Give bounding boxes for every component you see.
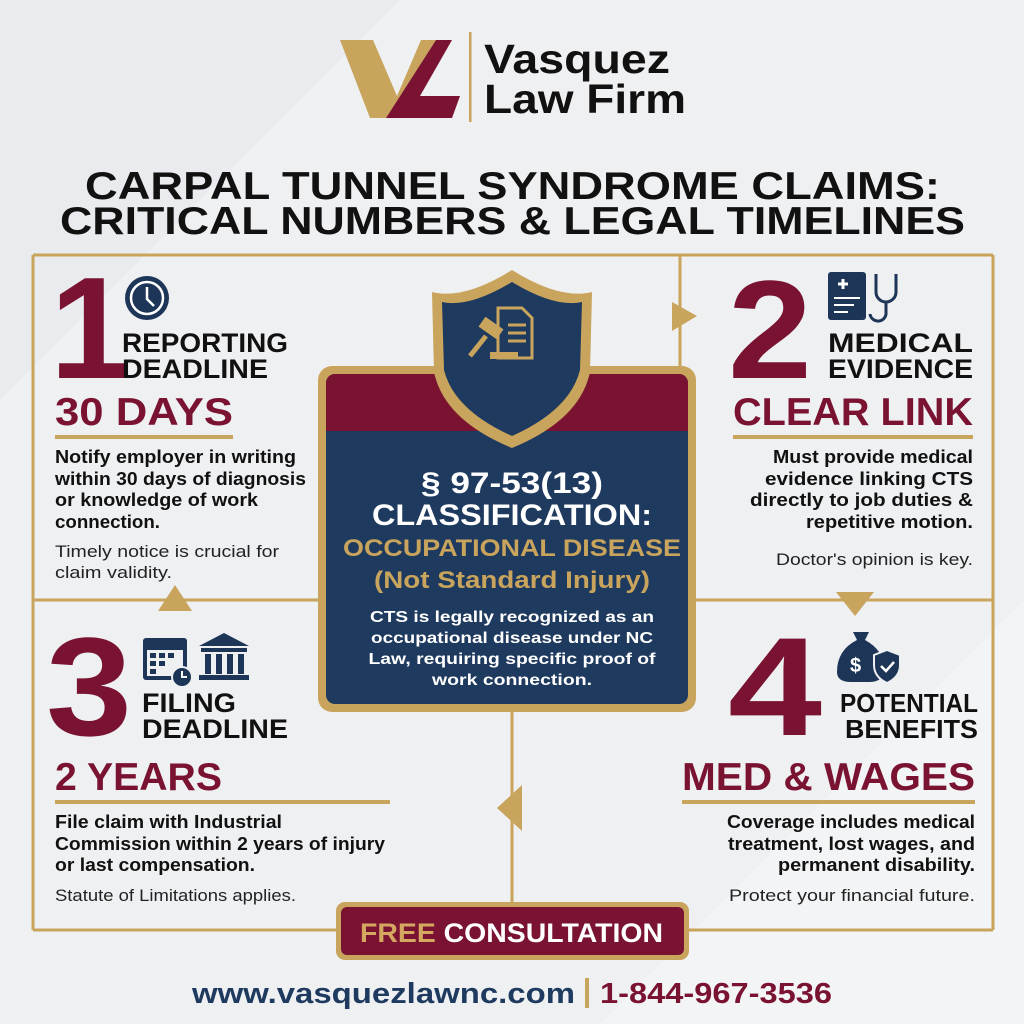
panel: 4 potential benefits: MED & WAGES bbox=[682, 756, 975, 799]
arrow: down bbox=[836, 592, 874, 616]
icon: shield with gavel bbox=[432, 270, 592, 448]
arrow: up bbox=[158, 585, 192, 611]
panel: center classification: occupational disease under NC bbox=[371, 630, 654, 647]
panel: 2 medical evidence: repetitive motion. bbox=[806, 512, 973, 532]
panel: 3 filing deadline: FILING bbox=[142, 688, 236, 718]
panel: 4 potential benefits: permanent disability. bbox=[778, 855, 975, 875]
panel: center classification: (Not Standard Injury) bbox=[374, 567, 650, 594]
icon: calendar bbox=[143, 638, 192, 687]
panel: center classification: Law, requiring specific proof of bbox=[368, 651, 656, 668]
icon: medical document stethoscope bbox=[828, 272, 896, 321]
logo bbox=[340, 32, 686, 122]
panel: 3 filing deadline: File claim with Industrial bbox=[55, 812, 282, 832]
panel: 4 potential benefits: POTENTIAL bbox=[840, 688, 978, 718]
title: CARPAL TUNNEL SYNDROME CLAIMS: bbox=[85, 165, 940, 208]
icon: courthouse bbox=[199, 633, 249, 680]
panel: 2 medical evidence: Must provide medical bbox=[773, 447, 973, 467]
panel: 4 potential benefits: 4 bbox=[728, 608, 822, 765]
panel: 3 filing deadline: 2 YEARS bbox=[55, 756, 222, 799]
button: free consultation: FREE CONSULTATION bbox=[360, 918, 663, 948]
panel: 1 reporting deadline: connection. bbox=[55, 512, 160, 532]
panel: 2 medical evidence: 2 bbox=[728, 251, 812, 408]
panel: 1 reporting deadline: claim validity. bbox=[55, 563, 172, 582]
panel: 1 reporting deadline: Notify employer in writing bbox=[55, 447, 296, 467]
panel: 2 medical evidence: evidence linking CTS bbox=[765, 469, 973, 489]
panel: 2 medical evidence bbox=[728, 251, 973, 569]
panel: center classification: CLASSIFICATION: bbox=[372, 499, 652, 532]
button: free consultation bbox=[336, 902, 689, 960]
footer contact: www.vasquezlawnc.com bbox=[191, 978, 575, 1010]
panel: 1 reporting deadline: DEADLINE bbox=[122, 354, 268, 384]
panel: 3 filing deadline: or last compensation. bbox=[55, 855, 255, 875]
panel: 2 medical evidence: CLEAR LINK bbox=[733, 391, 973, 434]
arrow: left bbox=[497, 785, 522, 831]
title bbox=[60, 165, 965, 243]
icon: money bag shield bbox=[837, 632, 900, 683]
panel: 1 reporting deadline: REPORTING bbox=[122, 328, 288, 358]
panel: center classification: work connection. bbox=[431, 672, 592, 689]
panel: 3 filing deadline: 3 bbox=[46, 608, 132, 765]
panel: 2 medical evidence: Doctor's opinion is key. bbox=[776, 550, 973, 569]
panel: 2 medical evidence: directly to job duties & bbox=[750, 490, 973, 510]
panel: center classification: § 97-53(13) bbox=[421, 467, 603, 500]
panel: 1 reporting deadline: within 30 days of diagnosis bbox=[54, 469, 306, 489]
panel: 3 filing deadline: DEADLINE bbox=[142, 714, 288, 744]
panel: 2 medical evidence: MEDICAL bbox=[828, 328, 973, 358]
panel: 1 reporting deadline: Timely notice is crucial for bbox=[55, 542, 279, 561]
panel: 4 potential benefits bbox=[682, 608, 978, 905]
panel: center classification bbox=[318, 270, 696, 712]
panel: 3 filing deadline bbox=[46, 608, 390, 905]
panel: center classification: OCCUPATIONAL DISEASE bbox=[343, 535, 681, 562]
panel: 1 reporting deadline bbox=[50, 247, 306, 582]
icon: clock bbox=[125, 276, 169, 320]
panel: 4 potential benefits: Protect your financial future. bbox=[729, 886, 975, 905]
title: CRITICAL NUMBERS & LEGAL TIMELINES bbox=[60, 200, 965, 243]
panel: 1 reporting deadline: 30 DAYS bbox=[55, 391, 233, 434]
logo: Vasquez bbox=[484, 36, 670, 82]
footer contact bbox=[191, 978, 832, 1010]
panel: 4 potential benefits: treatment, lost wages, and bbox=[728, 834, 975, 854]
panel: 1 reporting deadline: or knowledge of work bbox=[55, 490, 259, 510]
logo: Law Firm bbox=[484, 76, 686, 122]
icon: money bag shield: $ bbox=[850, 655, 861, 677]
panel: 3 filing deadline: Commission within 2 years of injury bbox=[55, 834, 385, 854]
panel: 1 reporting deadline: 1 bbox=[50, 247, 131, 409]
footer contact: 1-844-967-3536 bbox=[600, 978, 832, 1010]
panel: 4 potential benefits: Coverage includes medical bbox=[727, 812, 975, 832]
panel: 2 medical evidence: EVIDENCE bbox=[828, 354, 973, 384]
panel: 3 filing deadline: Statute of Limitations applies. bbox=[55, 886, 296, 905]
panel: center classification: CTS is legally recognized as an bbox=[370, 609, 654, 626]
panel: 4 potential benefits: BENEFITS bbox=[845, 714, 978, 744]
arrow: right bbox=[672, 302, 697, 331]
